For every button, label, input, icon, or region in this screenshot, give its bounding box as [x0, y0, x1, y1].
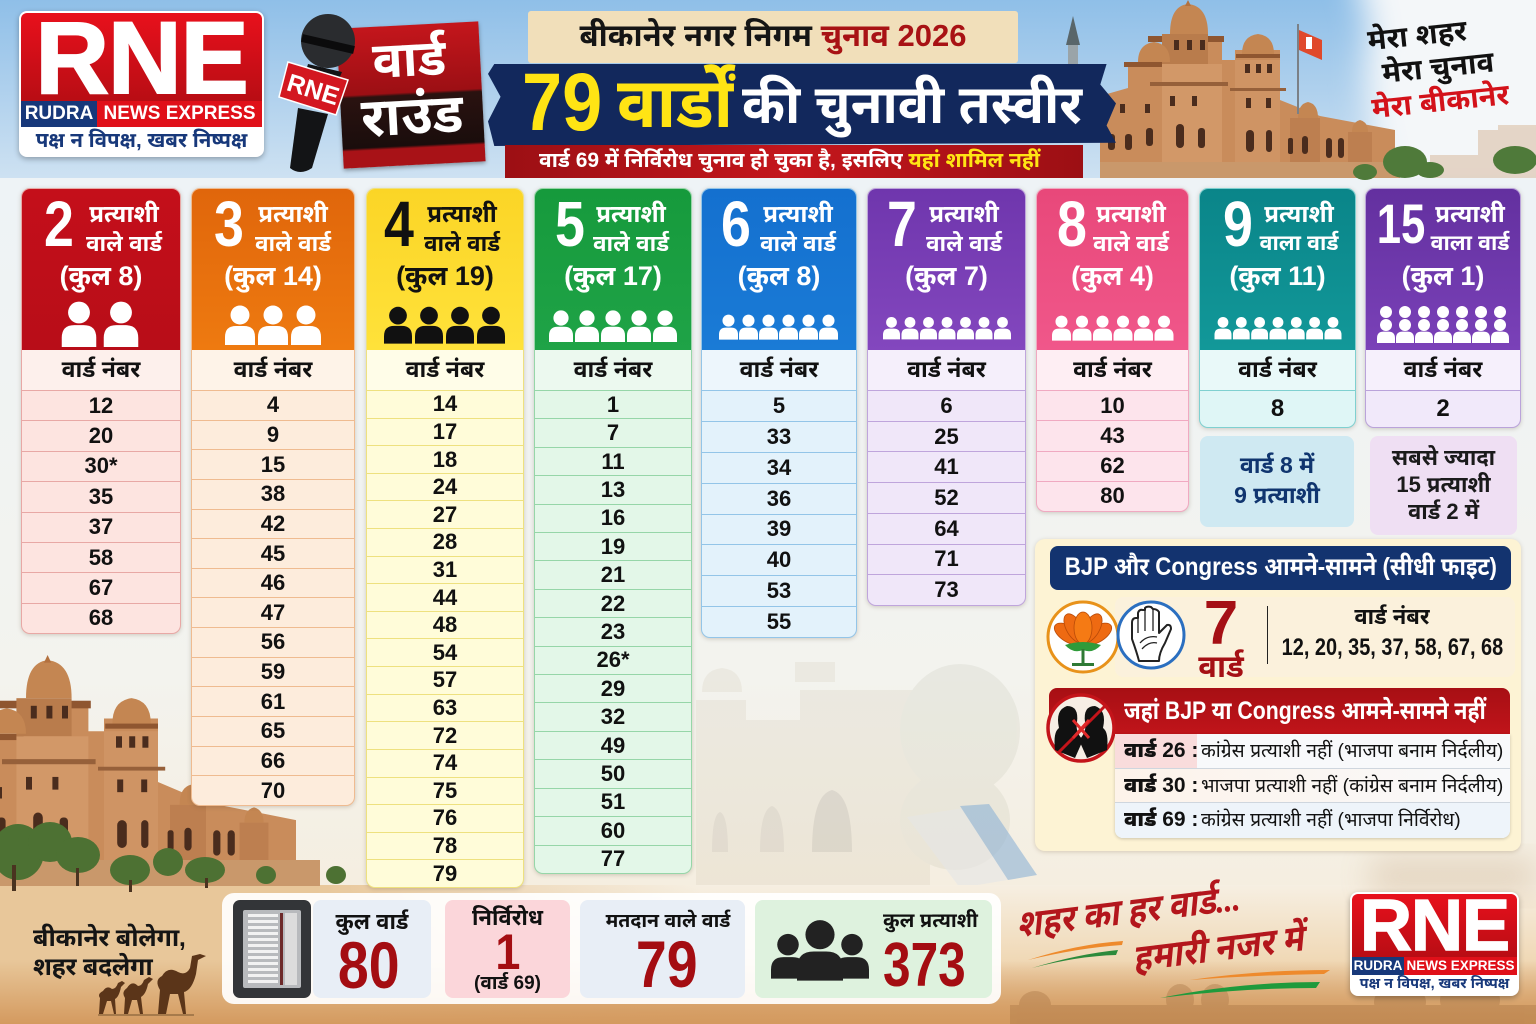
exception rows: भाजपा प्रत्याशी नहीं (कांग्रेस बनाम निर्दलीय): [1201, 776, 1503, 797]
panel: 2 candidates: प्रत्याशी: [89, 201, 159, 228]
top palace: [1100, 0, 1400, 178]
panel: 7 candidates: वाले वार्ड: [926, 231, 1002, 256]
panel: 5 candidates: 22: [601, 591, 625, 616]
exception rows: वार्ड 26 :: [1124, 739, 1198, 762]
panel: 7 candidates: 73: [934, 577, 959, 602]
panel: 3 candidates: 4: [267, 392, 279, 417]
panel: 3 candidates: 45: [261, 541, 285, 566]
panel: 5 candidates: 19: [601, 534, 625, 559]
panel: 7 candidates: 41: [934, 454, 959, 479]
ward numbers list: [1281, 604, 1503, 661]
panel: 2 candidates: 20: [89, 423, 113, 448]
ward round badge: [336, 21, 486, 169]
panel: 5 candidates: 77: [601, 846, 625, 871]
icon: microphone: RNE: [284, 69, 342, 111]
icon: no candidate: [1046, 693, 1116, 763]
panel: 9 candidates: 8: [1271, 395, 1284, 422]
panel: 4 candidates: 75: [433, 778, 457, 803]
panel: 5 candidates: 1: [607, 392, 619, 417]
stat: polling wards: 79: [636, 927, 697, 1001]
panel: 3 candidates: प्रत्याशी: [258, 201, 328, 228]
heading: direct fight: [1050, 546, 1511, 590]
panel: 15 candidates: वार्ड नंबर: [1404, 356, 1482, 382]
panel: 9 candidates: वार्ड नंबर: [1238, 356, 1317, 382]
panel: 4 candidates: 24: [433, 474, 457, 499]
panel: 8 candidates: 10: [1100, 393, 1125, 418]
panel: 2 candidates: 35: [89, 484, 113, 509]
panel: 3 candidates: [191, 188, 355, 806]
panel: 8 candidates: (कुल 4): [1071, 261, 1154, 291]
panel: 3 candidates: 3: [214, 188, 244, 260]
panel: 3 candidates: 9: [267, 422, 279, 447]
panel: 7 candidates: वार्ड नंबर: [907, 356, 986, 382]
panel: 3 candidates: 42: [261, 511, 285, 536]
stats bar: [222, 893, 1001, 1004]
panel: 2 candidates: 12: [89, 393, 113, 418]
panel: 8 candidates: वाले वार्ड: [1093, 231, 1169, 256]
panel: 4 candidates: 14: [433, 391, 457, 416]
logo: RNE bottom: पक्ष न विपक्ष, खबर निष्पक्ष: [1360, 976, 1509, 992]
icon: BJP lotus: [1046, 600, 1118, 674]
panel: 4 candidates: 76: [433, 805, 457, 830]
panel: 7 candidates: [867, 188, 1026, 606]
panel: 4 candidates: 28: [433, 529, 457, 554]
panel: 15 candidates: 2: [1436, 395, 1450, 422]
panel: 8 candidates: वार्ड नंबर: [1073, 356, 1152, 382]
panel: 7 candidates: 7: [887, 188, 917, 260]
panel: 4 candidates: (कुल 19): [396, 261, 494, 291]
callout: ward 2: 15 प्रत्याशी: [1396, 472, 1491, 497]
heading: direct fight: BJP और Congress आमने-सामने (सीधी फाइट): [1064, 553, 1497, 581]
panel: 4 candidates: 57: [433, 667, 457, 692]
panel: 7 candidates: 25: [934, 424, 959, 449]
panel: 15 candidates: 15: [1377, 192, 1425, 255]
panel: 4 candidates: वाले वार्ड: [424, 231, 500, 256]
stat: total wards: कुल वार्ड: [336, 909, 408, 934]
exception rows: वार्ड 69 :: [1124, 808, 1198, 831]
stat: polling wards: [580, 900, 745, 998]
panel: 5 candidates: 23: [601, 619, 625, 644]
panel: 2 candidates: 2: [44, 188, 74, 260]
logo: RNE bottom: NEWS EXPRESS: [1406, 958, 1515, 973]
panel: 5 candidates: 21: [601, 562, 625, 587]
right far palace: [1430, 125, 1536, 178]
panel: 9 candidates: [1199, 188, 1356, 428]
slogan: [1366, 15, 1511, 125]
panel: 4 candidates: 18: [433, 447, 457, 472]
slogan: Bikaner bolega: [33, 924, 186, 981]
callout: ward 2: वार्ड 2 में: [1408, 499, 1479, 524]
logo: RNE bottom: [1350, 892, 1519, 996]
panel: 3 candidates: 46: [261, 570, 285, 595]
panel: 15 candidates: प्रत्याशी: [1435, 201, 1505, 228]
slogan: Bikaner bolega: शहर बदलेगा: [33, 953, 152, 981]
panel: 4 candidates: 78: [433, 833, 457, 858]
exception rows: वार्ड 30 :: [1124, 774, 1198, 797]
panel: 15 candidates: वाला वार्ड: [1430, 231, 1510, 255]
panel: 6 candidates: 33: [767, 424, 791, 449]
panel: 6 candidates: [701, 188, 857, 638]
panel: 7 candidates: 71: [934, 546, 959, 571]
panel: 3 candidates: 70: [261, 778, 285, 803]
panel: 2 candidates: 68: [89, 605, 113, 630]
panel: 5 candidates: 13: [601, 477, 625, 502]
stat: total candidates: 373: [883, 931, 966, 1000]
title strip: [528, 11, 1018, 63]
panel: 8 candidates: 43: [1100, 423, 1125, 448]
panel: 4 candidates: 72: [433, 723, 457, 748]
panel: 5 candidates: [534, 188, 692, 874]
subheading: [505, 145, 1083, 178]
icon: people group: [771, 920, 869, 981]
panel: 3 candidates: वार्ड नंबर: [234, 356, 312, 382]
panel: 4 candidates: 17: [433, 419, 457, 444]
panel: 5 candidates: 11: [601, 449, 625, 474]
panel: 3 candidates: 38: [261, 481, 285, 506]
panel: 9 candidates: प्रत्याशी: [1264, 201, 1334, 228]
panel: 15 candidates: (कुल 1): [1402, 261, 1484, 291]
panel: 4 candidates: प्रत्याशी: [427, 201, 497, 228]
panel: 4 candidates: 44: [433, 585, 457, 610]
panel: 3 candidates: वाले वार्ड: [255, 231, 331, 256]
ward numbers list: वार्ड नंबर: [1354, 604, 1430, 629]
panel: 8 candidates: प्रत्याशी: [1096, 201, 1166, 228]
icon: camels: [98, 954, 206, 1016]
heading: no direct fight: [1049, 688, 1510, 734]
panel: 2 candidates: 30*: [84, 453, 118, 478]
title strip: बीकानेर नगर निगम चुनाव 2026: [579, 18, 967, 53]
panel: 9 candidates: वाला वार्ड: [1259, 231, 1339, 255]
stat: total candidates: कुल प्रत्याशी: [883, 910, 978, 932]
panel: 6 candidates: 34: [767, 455, 791, 480]
logo: RNE top: पक्ष न विपक्ष, खबर निष्पक्ष: [36, 129, 247, 152]
main headline: वार्डों: [617, 64, 733, 142]
panel: 8 candidates: 80: [1100, 483, 1125, 508]
panel: 2 candidates: 37: [89, 514, 113, 539]
exception rows: [1115, 734, 1510, 838]
panel: 4 candidates: 54: [433, 640, 457, 665]
panel: 5 candidates: 51: [601, 789, 625, 814]
panel: 5 candidates: प्रत्याशी: [596, 201, 666, 228]
logo: RNE top: [19, 11, 264, 157]
panel: 3 candidates: 47: [261, 600, 285, 625]
panel: 7 candidates: 6: [940, 393, 953, 418]
ward round badge: वार्ड: [371, 29, 447, 89]
panel: 7 candidates: 52: [934, 485, 959, 510]
panel: 6 candidates: 36: [767, 486, 791, 511]
callout: ward 2: [1370, 436, 1517, 535]
panel: 5 candidates: वार्ड नंबर: [574, 356, 652, 382]
panel: 4 candidates: 74: [433, 750, 457, 775]
slogan: मेरा चुनाव: [1381, 46, 1496, 90]
ward round badge: राउंड: [360, 83, 465, 149]
panel: 5 candidates: 29: [601, 676, 625, 701]
panel: 2 candidates: वार्ड नंबर: [62, 356, 140, 382]
stat: unopposed: (वार्ड 69): [474, 973, 541, 994]
main headline: की चुनावी तस्वीर: [742, 75, 1082, 135]
panel: BJP vs Congress: [1035, 539, 1521, 851]
panel: 6 candidates: 55: [767, 609, 791, 634]
seven wards count: [1198, 589, 1244, 684]
ward numbers list: 12, 20, 35, 37, 58, 67, 68: [1281, 634, 1503, 661]
panel: 6 candidates: 53: [767, 578, 791, 603]
panel: 6 candidates: 5: [773, 393, 785, 418]
panel: 8 candidates: [1036, 188, 1189, 512]
direct fight row: [1115, 597, 1515, 677]
panel: 6 candidates: वार्ड नंबर: [740, 356, 818, 382]
panel: 9 candidates: (कुल 11): [1229, 261, 1326, 291]
panel: 3 candidates: (कुल 14): [224, 261, 322, 291]
panel: 5 candidates: 60: [601, 818, 625, 843]
faded gate scene: [696, 662, 1020, 885]
panel: 4 candidates: 79: [433, 861, 457, 886]
panel: 6 candidates: प्रत्याशी: [763, 201, 833, 228]
panel: 5 candidates: वाले वार्ड: [593, 231, 669, 256]
callout: ward 8: [1200, 436, 1354, 527]
panel: 4 candidates: [366, 188, 524, 888]
icon: Congress hand: [1116, 600, 1186, 670]
panel: 6 candidates: 39: [767, 516, 791, 541]
callout: ward 2: सबसे ज्यादा: [1392, 445, 1495, 470]
tricolor swooshes: [1028, 941, 1330, 998]
panel: 5 candidates: 16: [601, 505, 625, 530]
exception rows: कांग्रेस प्रत्याशी नहीं (भाजपा बनाम निर्दलीय): [1201, 741, 1503, 762]
panel: 7 candidates: 64: [934, 516, 959, 541]
panel: 2 candidates: (कुल 8): [60, 261, 142, 291]
panel: 3 candidates: 56: [261, 629, 285, 654]
logo: RNE top: RUDRA: [25, 103, 93, 124]
panel: 4 candidates: 48: [433, 612, 457, 637]
panel: 4 candidates: 63: [433, 695, 457, 720]
icon: voting machine: [233, 900, 311, 998]
panel: 7 candidates: प्रत्याशी: [929, 201, 999, 228]
stat: unopposed: [445, 900, 570, 998]
stat: unopposed: 1: [495, 924, 520, 980]
panel: 8 candidates: 8: [1057, 188, 1087, 260]
tagline: हमारी नजर में: [1130, 918, 1305, 980]
panel: 6 candidates: 6: [721, 188, 751, 260]
exception rows: कांग्रेस प्रत्याशी नहीं (भाजपा निर्विरोध): [1201, 810, 1461, 831]
panel: 3 candidates: 66: [261, 748, 285, 773]
stat: total candidates: [755, 900, 992, 998]
panel: 4 candidates: वार्ड नंबर: [406, 356, 484, 382]
stat: unopposed: निर्विरोध: [472, 905, 543, 930]
stat: polling wards: मतदान वाले वार्ड: [606, 910, 730, 932]
callout: ward 8: वार्ड 8 में: [1240, 452, 1314, 478]
panel: 6 candidates: 40: [767, 547, 791, 572]
panel: 5 candidates: 7: [607, 420, 619, 445]
panel: 9 candidates: 9: [1223, 188, 1253, 260]
panel: 4 candidates: 31: [433, 557, 457, 582]
main headline: 79: [522, 57, 602, 148]
panel: 3 candidates: 15: [261, 452, 285, 477]
logo: RNE top: NEWS EXPRESS: [103, 103, 256, 124]
panel: 6 candidates: (कुल 8): [738, 261, 820, 291]
minaret: [1068, 45, 1078, 65]
panel: 2 candidates: 67: [89, 575, 113, 600]
tagline: शहर का हर वार्ड...: [1014, 878, 1242, 946]
panel: 2 candidates: 58: [89, 545, 113, 570]
tagline: [1014, 878, 1330, 998]
panel: 5 candidates: 50: [601, 761, 625, 786]
panel: 7 candidates: (कुल 7): [905, 261, 988, 291]
bottom-left palace: [0, 655, 302, 881]
slogan: मेरा शहर: [1366, 15, 1468, 57]
panel: 5 candidates: 5: [555, 188, 585, 260]
subheading: वार्ड 69 में निर्विरोध चुनाव हो चुका है, इसलिए यहां शामिल नहीं: [539, 149, 1040, 172]
stat: total wards: 80: [338, 928, 400, 1002]
slogan: मेरा बीकानेर: [1370, 79, 1511, 125]
panel: 4 candidates: 4: [384, 188, 414, 260]
panel: 8 candidates: 62: [1100, 453, 1125, 478]
icon: microphone: [278, 14, 355, 172]
main headline: [488, 64, 1116, 146]
panel: 4 candidates: 27: [433, 502, 457, 527]
panel: 5 candidates: 32: [601, 704, 625, 729]
callout: ward 8: 9 प्रत्याशी: [1234, 482, 1320, 508]
panel: 2 candidates: [21, 188, 181, 634]
panel: 6 candidates: वाले वार्ड: [760, 231, 836, 256]
panel: 3 candidates: 61: [261, 689, 285, 714]
panel: 5 candidates: 49: [601, 733, 625, 758]
panel: 3 candidates: 65: [261, 718, 285, 743]
panel: 5 candidates: (कुल 17): [564, 261, 662, 291]
panel: 3 candidates: 59: [261, 659, 285, 684]
seven wards count: 7: [1204, 589, 1238, 658]
heading: no direct fight: जहां BJP या Congress आमने-सामने नहीं: [1124, 697, 1486, 725]
slogan: Bikaner bolega: बीकानेर बोलेगा,: [33, 924, 186, 952]
panel: 2 candidates: वाले वार्ड: [86, 231, 162, 256]
panel: 15 candidates: [1365, 188, 1521, 428]
panel: 5 candidates: 26*: [596, 647, 630, 672]
logo: RNE bottom: RUDRA: [1354, 958, 1402, 973]
seven wards count: वार्ड: [1198, 649, 1244, 684]
stat: total wards: [313, 900, 431, 998]
